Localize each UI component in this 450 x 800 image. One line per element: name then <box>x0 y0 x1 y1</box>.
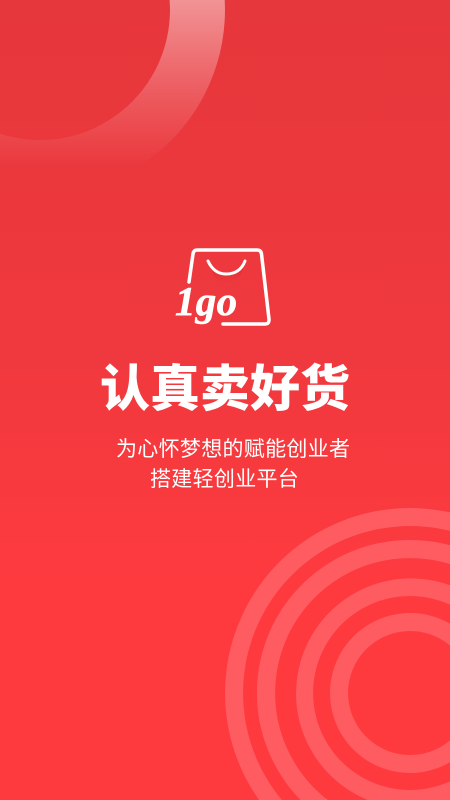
logo wordmark: 1go <box>175 278 237 324</box>
headline: 认真卖好货 <box>100 361 350 417</box>
subtitle line 2: 搭建轻创业平台 <box>150 468 299 491</box>
subtitle line 1: 为心怀梦想的赋能创业者 <box>116 438 350 461</box>
logo: shopping bag <box>189 250 269 324</box>
top left fading ring <box>0 0 225 195</box>
logo: smile shadow <box>209 264 245 283</box>
bottom right concentric rings <box>225 508 450 800</box>
